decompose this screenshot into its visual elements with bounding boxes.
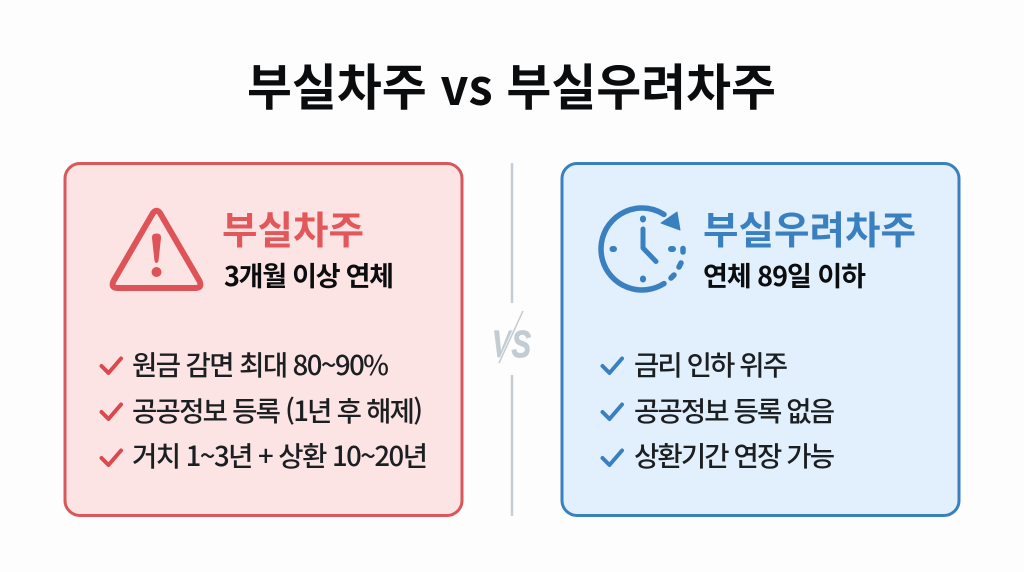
divider with VS mark [492, 163, 531, 516]
panel: 부실차주 [65, 164, 462, 516]
icon: check 3 [602, 450, 622, 465]
list: 부실차주 항목 [102, 343, 428, 474]
subheading: 연체 89일 이하: 연체 89일 이하 [703, 255, 866, 294]
item 2: 공공정보 등록 없음 [634, 389, 835, 429]
item 3: 거치 1~3년 + 상환 10~20년 [132, 434, 428, 474]
icon: check 1 [102, 358, 121, 373]
panel: 부실우려차주 [562, 164, 959, 516]
icon: clock with arrow [601, 208, 683, 290]
title: 부실차주 vs 부실우려차주 [247, 48, 776, 120]
icon: warning triangle [113, 211, 200, 288]
item 2: 공공정보 등록 (1년 후 해제) [132, 389, 423, 429]
icon: check 2 [102, 404, 121, 419]
heading: 부실차주: 부실차주 [222, 200, 364, 256]
item 1: 원금 감면 최대 80~90% [132, 343, 389, 383]
icon: check 1 [602, 358, 622, 373]
list: 부실우려차주 항목 [602, 343, 835, 474]
VS mark [492, 311, 531, 366]
item 1: 금리 인하 위주 [634, 343, 788, 383]
item 3: 상환기간 연장 가능 [634, 434, 835, 474]
subheading: 3개월 이상 연체: 3개월 이상 연체 [224, 255, 394, 294]
heading: 부실우려차주: 부실우려차주 [703, 200, 916, 256]
VS mark: VS [492, 324, 531, 366]
icon: check 2 [602, 404, 622, 419]
icon: check 3 [102, 450, 121, 465]
